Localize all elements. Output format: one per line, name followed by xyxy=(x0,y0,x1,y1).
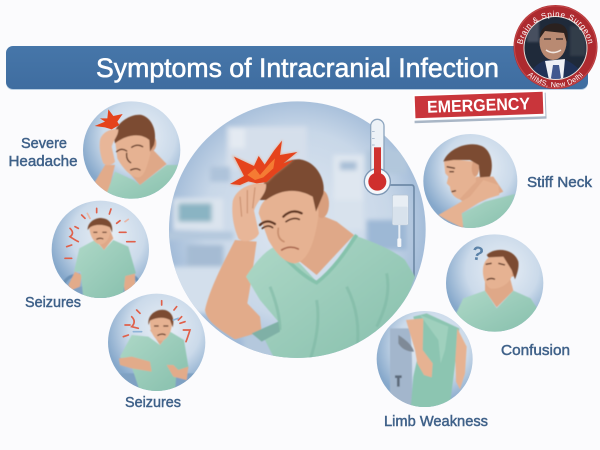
pain burst on head xyxy=(230,139,299,186)
label: stiff neck: Stiff Neck xyxy=(527,175,593,191)
surgeon badge xyxy=(514,5,598,89)
hand xyxy=(100,129,118,165)
gown folds xyxy=(270,273,388,360)
tremor marks xyxy=(65,208,135,258)
title: Symptoms of Intracranial Infection xyxy=(96,53,499,83)
panel: seizures 1 xyxy=(52,201,149,307)
emergency tag xyxy=(413,90,547,123)
arm xyxy=(94,164,116,192)
hair xyxy=(258,159,324,212)
hair xyxy=(443,144,492,177)
features xyxy=(154,326,168,336)
panel: main illustration of patient with headache xyxy=(167,101,426,363)
IV drip stand xyxy=(390,185,414,277)
neck xyxy=(485,272,513,307)
gown xyxy=(456,291,538,333)
face xyxy=(259,187,319,263)
gown fold xyxy=(420,315,448,363)
hair xyxy=(148,310,173,327)
label: seizures 2: Seizures xyxy=(125,395,181,411)
arm xyxy=(438,180,499,228)
ear xyxy=(314,190,329,218)
arms xyxy=(68,272,135,292)
label: seizures 1: Seizures xyxy=(25,295,81,311)
label: severe headache: Headache xyxy=(8,154,78,170)
panel: seizures 2 xyxy=(108,294,205,393)
bed rail xyxy=(390,328,412,407)
burst xyxy=(95,109,123,129)
neck xyxy=(150,323,170,345)
label: severe headache: Severe xyxy=(21,136,67,152)
tremor marks xyxy=(123,301,190,342)
thermometer xyxy=(364,119,390,195)
neck xyxy=(300,216,354,276)
face xyxy=(115,135,150,177)
ear xyxy=(472,160,479,176)
ear xyxy=(509,262,517,277)
hair xyxy=(113,115,155,152)
hair xyxy=(487,250,519,279)
features xyxy=(486,263,505,280)
gown xyxy=(411,313,459,408)
badge text top: Brain & Spine Surgeon xyxy=(517,10,592,44)
arm right xyxy=(455,328,467,389)
gown xyxy=(120,332,189,392)
bed xyxy=(119,373,194,388)
face xyxy=(150,316,172,341)
ear xyxy=(152,138,157,151)
title banner xyxy=(6,46,588,90)
gown xyxy=(74,240,136,298)
label: confusion: Confusion xyxy=(501,343,570,359)
mouth and eyes xyxy=(93,232,107,239)
panel: stiff neck xyxy=(423,134,517,230)
gown shading xyxy=(252,322,280,342)
gown xyxy=(106,165,178,200)
emergency text: EMERGENCY xyxy=(427,94,531,117)
features xyxy=(117,145,143,170)
neck xyxy=(458,177,503,207)
portrait photo xyxy=(524,16,587,81)
collar xyxy=(275,235,357,283)
hair xyxy=(88,218,112,233)
patient arm xyxy=(205,240,262,339)
neck xyxy=(99,231,114,250)
arms xyxy=(119,357,188,380)
label: limb weakness: Limb Weakness xyxy=(384,414,488,430)
arm left xyxy=(406,318,433,377)
gown xyxy=(459,194,515,230)
question mark: ? xyxy=(470,243,485,266)
bed rail xyxy=(63,275,139,285)
badge text bottom: AIIMS, New Delhi xyxy=(527,72,584,88)
eye xyxy=(447,167,456,192)
face xyxy=(483,255,513,289)
facial features xyxy=(260,211,302,250)
neck xyxy=(130,150,167,186)
face xyxy=(444,159,476,199)
face xyxy=(89,223,111,244)
panel: limb weakness xyxy=(377,311,473,408)
label: severe headache xyxy=(8,136,78,170)
patient gown xyxy=(246,235,415,363)
panel: confusion xyxy=(446,234,543,333)
panel: severe headache xyxy=(83,101,180,200)
blurred hospital room background xyxy=(167,127,407,360)
hand on head xyxy=(232,183,266,241)
